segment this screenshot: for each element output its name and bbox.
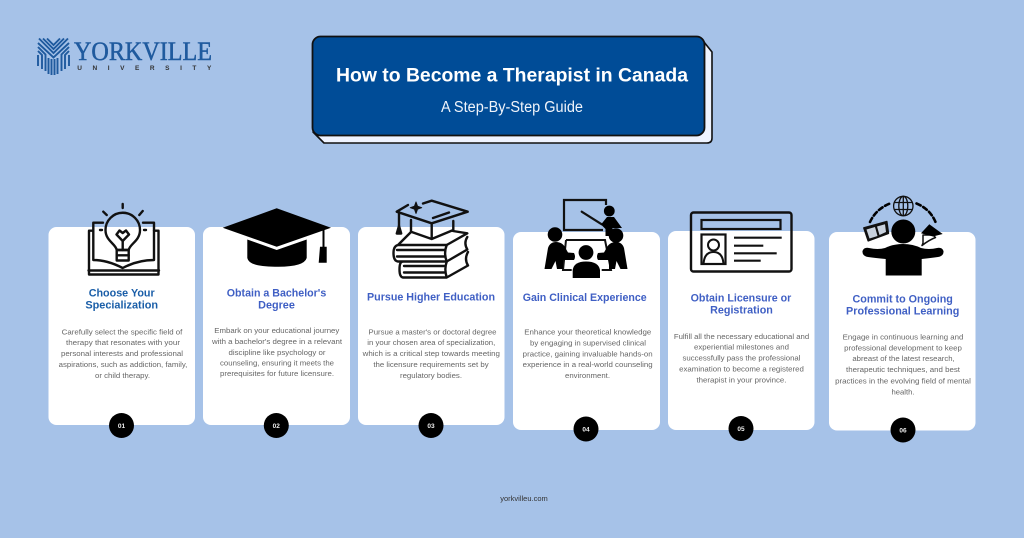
panel: step 1 choose your specialization (48, 204, 195, 438)
description: abreast of the latest research, (852, 354, 955, 363)
step number badge: 05 (737, 426, 745, 433)
banner backing sheet (313, 42, 712, 143)
card background (513, 232, 660, 430)
heading: Professional Learning (846, 305, 959, 317)
description: therapist in your province. (696, 375, 786, 384)
description: personal interests and professional (61, 349, 183, 358)
description (835, 332, 971, 396)
icon: person juggling globe, book and cap (862, 196, 944, 276)
description: Fulfill all the necessary educational and (674, 332, 809, 341)
description: Engage in continuous learning and (843, 332, 963, 341)
description: which is a critical step towards meeting (362, 349, 500, 358)
icon: light bulb over open book (88, 204, 159, 274)
description: practice, gaining invaluable hands-on (523, 349, 653, 358)
heading (227, 288, 326, 312)
step number badge: 03 (427, 423, 435, 430)
panel: step 3 pursue higher education (358, 201, 504, 438)
description: practices in the evolving field of mental (835, 376, 971, 385)
heading: Choose Your (89, 288, 155, 300)
logo: Yorkville University (38, 37, 212, 75)
card background (203, 227, 350, 425)
description: Pursue a master's or doctoral degree (368, 328, 496, 337)
logo subline: UNIVERSITY (77, 65, 212, 72)
description: therapy that resonates with your (66, 338, 180, 347)
description (523, 328, 653, 380)
description: experiential milestones and (694, 343, 789, 352)
description: examination to become a registered (679, 364, 804, 373)
footer url: yorkvilleu.com (500, 494, 548, 503)
step number badge (890, 418, 916, 442)
description: regulatory bodies. (400, 371, 462, 380)
heading (846, 293, 959, 317)
description: in your chosen area of specialization, (367, 338, 495, 347)
subtitle: A Step-By-Step Guide (441, 99, 583, 116)
step number badge: 02 (273, 423, 280, 430)
title banner (312, 36, 712, 143)
description (211, 326, 343, 378)
description: counseling, ensuring it meets the (220, 358, 334, 368)
step number badge (574, 416, 598, 442)
description: Embark on your educational journey (214, 326, 339, 335)
description (59, 328, 187, 380)
heading: Registration (710, 304, 773, 316)
heading: Pursue Higher Education (367, 291, 495, 303)
card background (668, 231, 814, 430)
heading: Gain Clinical Experience (523, 292, 647, 304)
description: or child therapy. (95, 371, 150, 380)
step number badge (728, 416, 754, 441)
description: environment. (565, 371, 610, 380)
icon: graduation cap on books (394, 201, 468, 278)
heading: Degree (258, 300, 295, 312)
panel: step 2 obtain a bachelor's degree (203, 208, 350, 438)
description: prerequisites for future licensure. (220, 369, 334, 378)
card background (829, 232, 976, 430)
description: therapeutic techniques, and best (846, 365, 961, 374)
description: professional development to keep (844, 343, 962, 352)
description: aspirations, such as addiction, family, (59, 360, 187, 369)
banner face (312, 36, 704, 136)
heading: Commit to Ongoing (853, 293, 953, 305)
logo wordmark: YORKVILLE (74, 37, 212, 66)
description (674, 332, 809, 384)
step number badge: 01 (118, 423, 125, 430)
heading (85, 288, 158, 312)
step number badge (418, 413, 444, 438)
panel: step 4 gain clinical experience (513, 200, 660, 442)
card background (48, 227, 195, 425)
icon: graduation cap (223, 208, 331, 267)
step number badge: 06 (899, 427, 907, 434)
description: the licensure requirements set by (373, 360, 489, 369)
logo mark (38, 38, 69, 75)
panel: step 6 commit to ongoing professional learning (829, 196, 976, 442)
description (362, 328, 500, 380)
heading: Specialization (85, 300, 158, 312)
step number badge: 04 (582, 426, 590, 433)
card background (358, 227, 504, 425)
description: Enhance your theoretical knowledge (524, 328, 651, 337)
description: by engaging in supervised clinical (530, 338, 646, 347)
heading: Obtain a Bachelor's (227, 288, 326, 300)
icon: licence card (691, 212, 792, 272)
main title: How to Become a Therapist in Canada (336, 66, 688, 87)
heading (691, 292, 792, 316)
description: health. (892, 387, 914, 396)
heading: Obtain Licensure or (691, 292, 792, 304)
step number badge (109, 413, 134, 438)
description: discipline like psychology or (228, 348, 326, 357)
step number badge (264, 413, 289, 438)
description: with a bachelor's degree in a relevant (211, 337, 343, 346)
icon: presenter and seated group (544, 200, 628, 278)
panel: step 5 obtain licensure or registration (668, 212, 814, 441)
description: Carefully select the specific field of (62, 328, 183, 337)
description: experience in a real-world counseling (523, 360, 653, 369)
description: successfully pass the professional (682, 354, 801, 363)
